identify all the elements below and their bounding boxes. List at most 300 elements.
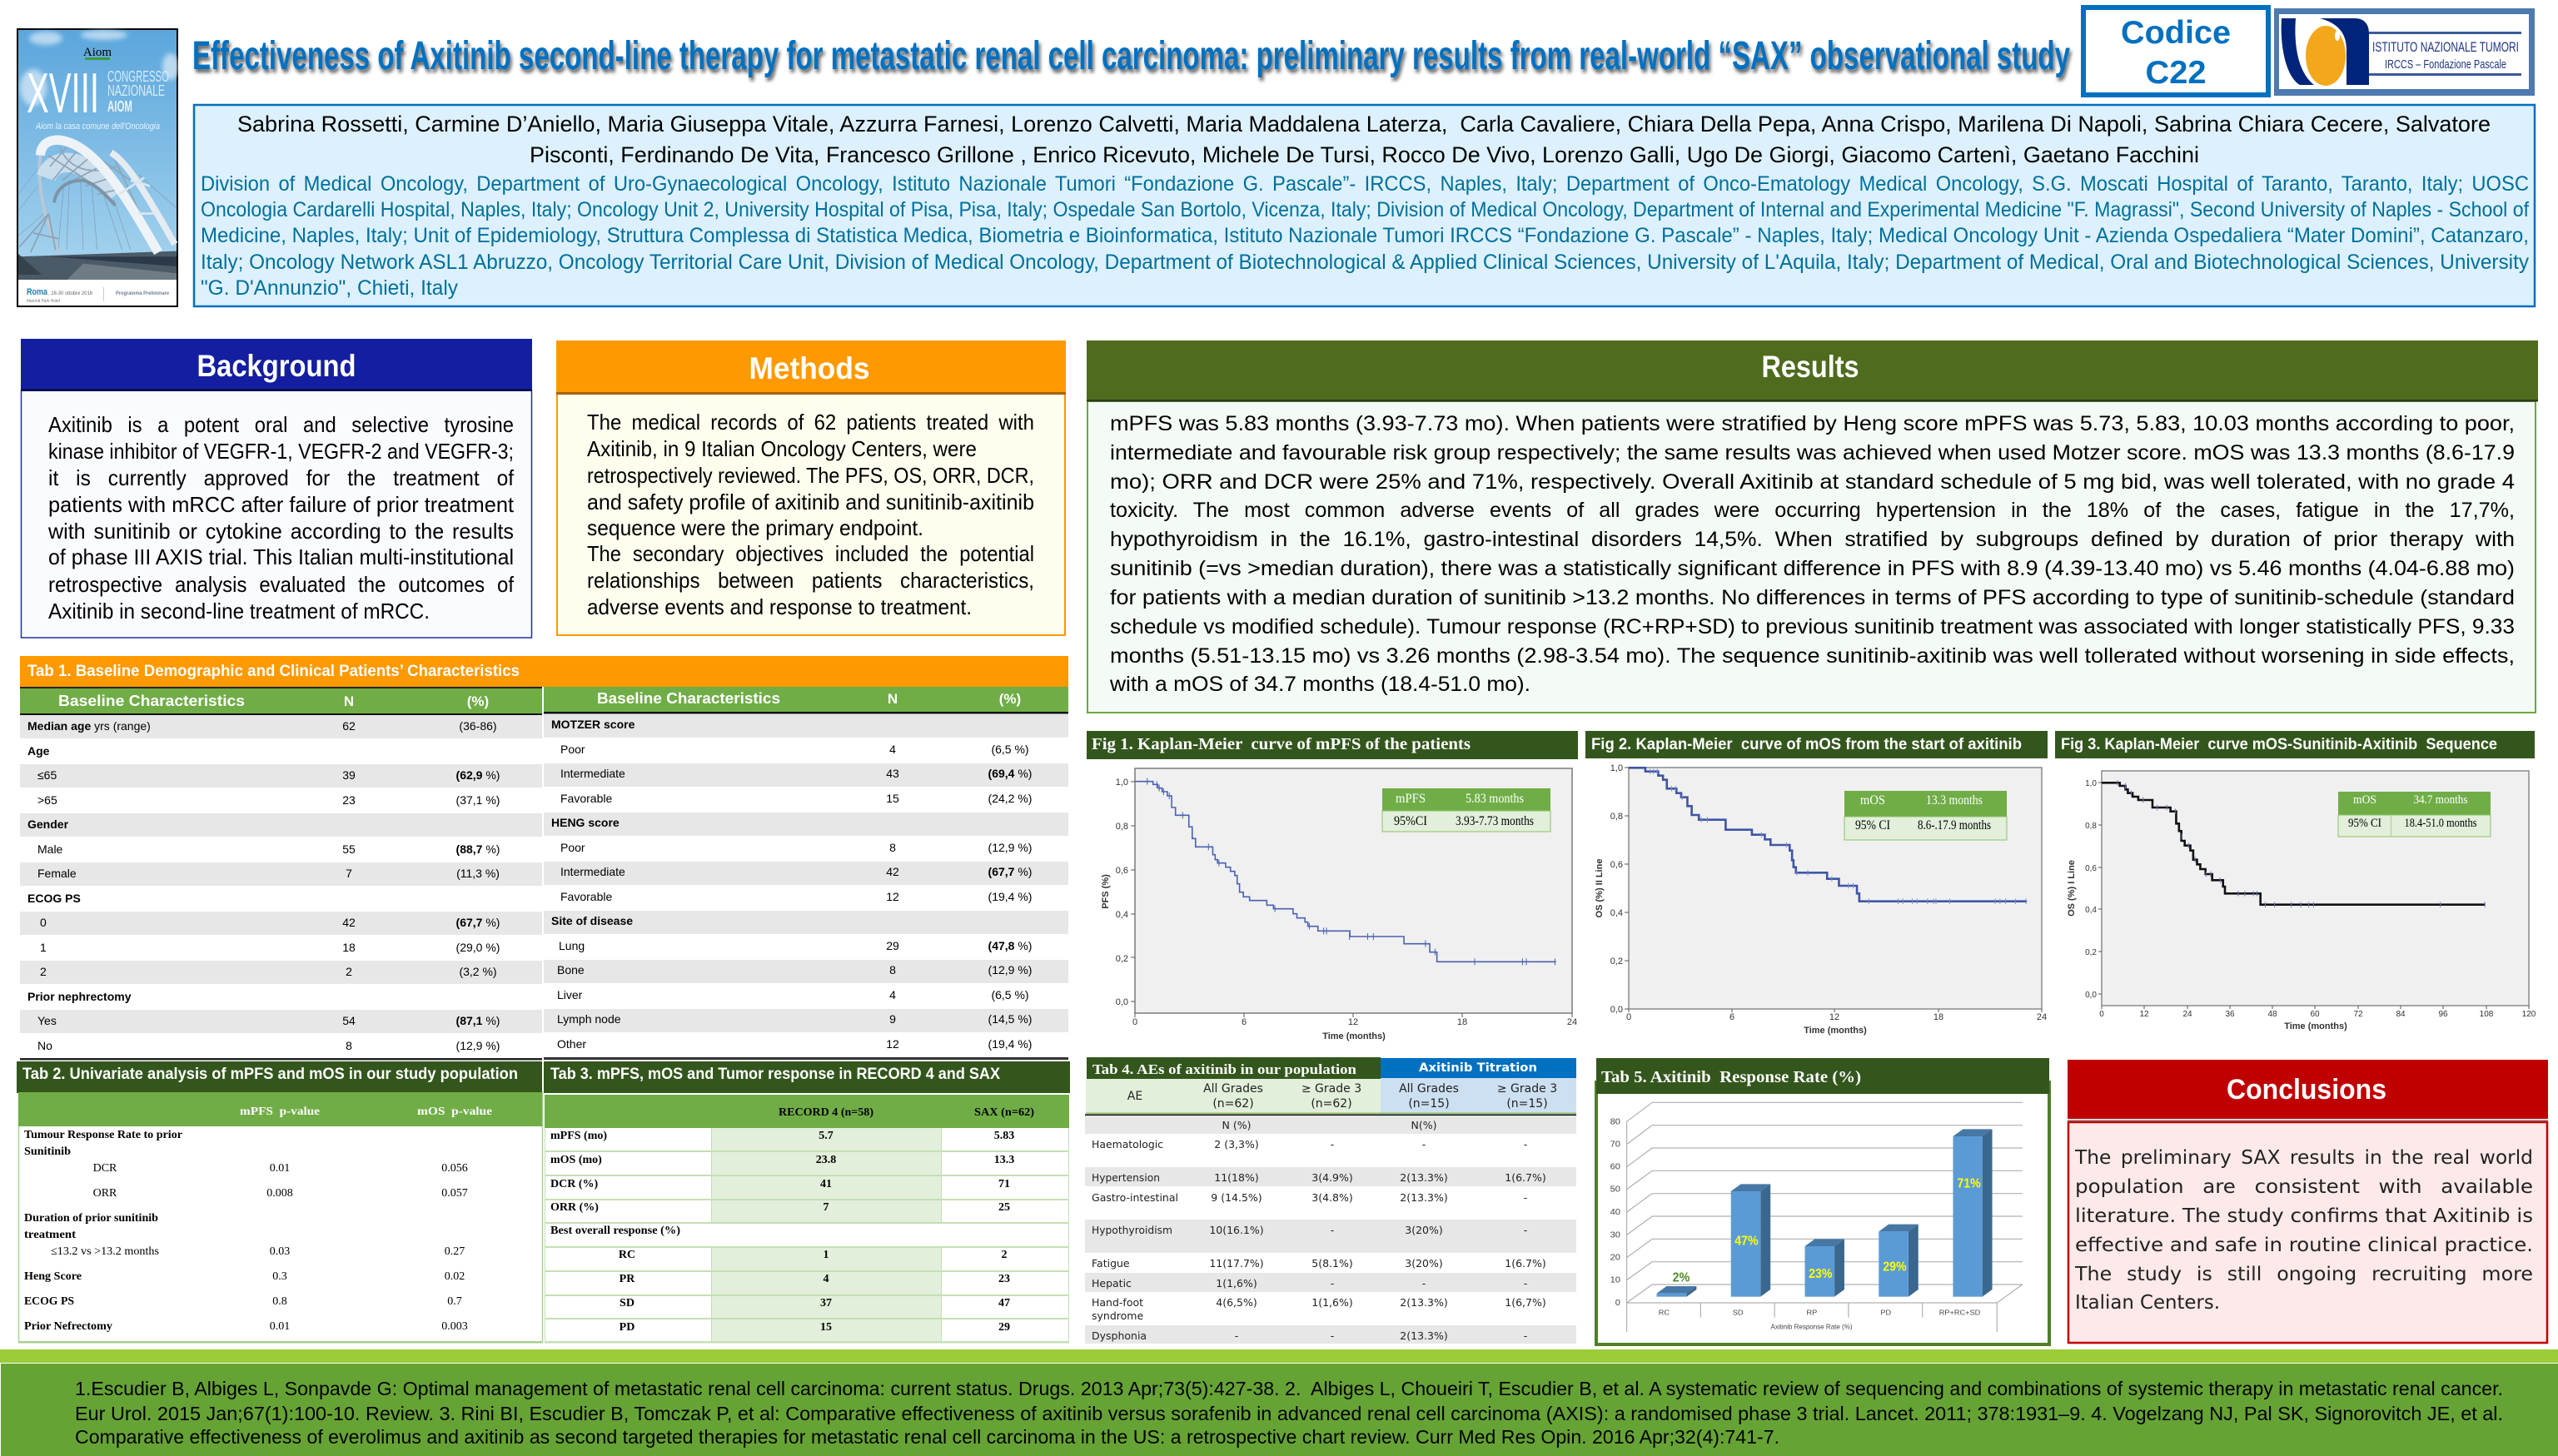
table 1 right column: (69,4 %)	[988, 767, 1032, 780]
table 2 cells: DCR	[93, 1162, 117, 1175]
table 3 cells: 23	[998, 1273, 1010, 1285]
panel: results	[1087, 340, 2538, 713]
table 1: baseline characteristics	[20, 656, 1068, 1061]
background text: with sunitinib or cytokine according to the results	[47, 519, 514, 544]
conclusions text: effective and safe in routine clinical practice.	[2075, 1235, 2533, 1256]
bar chart: SD	[1733, 1309, 1744, 1317]
table 1 right column: (14,5 %)	[988, 1012, 1032, 1026]
methods text: Axitinib, in 9 Italian Oncology Centers, were	[587, 436, 977, 461]
figure 3 survival curve	[2102, 780, 2485, 907]
conclusions text: literature. The study confirms that Axitinib is	[2075, 1205, 2533, 1227]
table 1 left column: ≤65	[37, 768, 57, 782]
figure 1 inset table: mPFS	[1396, 792, 1426, 806]
figure 2 axes labels: 6	[1729, 1012, 1734, 1022]
figure 2 title: Fig 2. Kaplan-Meier curve of mOS from the start of axitinib	[1591, 736, 2022, 753]
bar chart: 30	[1610, 1231, 1620, 1240]
table 3 cells: PD	[620, 1321, 635, 1334]
figure 3 axes labels: 1,0	[2085, 779, 2097, 788]
figure 1 axes labels: 0,0	[1116, 997, 1128, 1007]
table 3 cells: 37	[820, 1297, 832, 1309]
affiliations: "G. D'Annunzio", Chieti, Italy	[201, 276, 458, 300]
heading: conclusions: Conclusions	[2227, 1074, 2386, 1106]
figure 1 axes labels: 0,6	[1116, 866, 1128, 876]
table 4 cells: Hypothyroidism	[1092, 1224, 1172, 1236]
table 4 cells: 3(20%)	[1405, 1224, 1443, 1236]
table 4 cells: Gastro-intestinal	[1092, 1191, 1178, 1204]
table 2 cells: mOS p-value	[417, 1106, 492, 1118]
figure 1 axes labels: 18	[1457, 1017, 1467, 1027]
bar chart: RP	[1807, 1309, 1818, 1317]
table 3 cells: PR	[620, 1273, 635, 1285]
table 1 left column: (3,2 %)	[459, 965, 497, 978]
table 1 right column: 9	[889, 1012, 896, 1026]
authors and affiliations panel: Pisconti, Ferdinando De Vita, Francesco Grillone , Enrico Ricevuto, Michele De Tursi, Rocco De Vivo, Lorenzo Galli, Ugo De Giorgi, Giacomo Cartenì, Gaetano Facchini	[530, 142, 2199, 167]
table 3 cells: mOS (mo)	[550, 1154, 602, 1166]
table 1 left column: Yes	[37, 1014, 57, 1027]
table 1 right column: Poor	[560, 841, 585, 854]
figure 1 axes labels: 12	[1348, 1017, 1358, 1027]
figure 1 inset table: 5.83 months	[1466, 792, 1524, 806]
background text: of phase III AXIS trial. This Italian multi-institutional	[48, 544, 514, 569]
table 3 cells: DCR (%)	[550, 1178, 598, 1190]
table 1 left column: 18	[342, 941, 356, 954]
table 4 cells: ≥ Grade 3	[1497, 1082, 1557, 1096]
table 1 right column: 4	[889, 988, 896, 1001]
table 1 right column: (47,8 %)	[988, 939, 1032, 952]
table 1 right column: 29	[886, 939, 899, 952]
table 1 right column: (24,2 %)	[988, 792, 1032, 805]
results text: intermediate and favourable risk group respectively; the same results was achieved when used Motzer score. mOS was 13.3 months (8.6-17.9	[1110, 441, 2515, 465]
results text: schedule vs modified schedule). Tumour response (RC+RP+SD) to previous sunitinib treatment was associated with longer statistically PFS, 9.33	[1110, 615, 2515, 639]
table 3 cells: 7	[823, 1201, 829, 1214]
background text: patients with mRCC after failure of prior treatment	[48, 492, 515, 517]
table 4 cells: 9 (14.5%)	[1211, 1191, 1262, 1204]
table 1 left column: No	[37, 1039, 52, 1052]
table 4 cells: All Grades	[1203, 1082, 1263, 1096]
table 4: adverse events	[1085, 1057, 1576, 1344]
congress poster image: Marriott Park Hotel	[27, 299, 60, 304]
table 4 cells: 4(6,5%)	[1216, 1296, 1257, 1309]
figure 2 axes labels: 1,0	[1610, 763, 1623, 773]
table 1 right column: Intermediate	[560, 865, 625, 878]
bar chart: 23%	[1809, 1267, 1833, 1281]
bar chart: RP+RC+SD	[1939, 1309, 1980, 1317]
figure 3 axes labels: 12	[2139, 1010, 2149, 1019]
table 1 left column: (62,9 %)	[456, 768, 500, 782]
table 4 cells: -	[1524, 1138, 1527, 1150]
table 1 right column: 8	[889, 841, 896, 854]
table 2 cells: treatment	[24, 1229, 76, 1241]
figure 3 axes labels: 48	[2267, 1010, 2277, 1019]
congress poster image: XVIII	[27, 62, 99, 125]
table 1 right column: Baseline Characteristics	[597, 690, 780, 707]
table 4 cells: 2(13.3%)	[1400, 1296, 1448, 1309]
results text: sunitinib (=vs >median duration), there was a statistically significant difference in PFS with 8.9 (4.39-13.40 mo) vs 5.46 months (4.04-6.88 mo)	[1110, 557, 2515, 580]
bar chart: 10	[1610, 1276, 1620, 1285]
figure 1 inset table	[1382, 788, 1550, 832]
table 1 left column: Male	[37, 842, 63, 856]
methods text: sequence were the primary endpoint.	[587, 515, 923, 540]
figure 1 axes labels	[1101, 778, 1577, 1041]
table 4 cells: ≥ Grade 3	[1301, 1082, 1361, 1096]
figure 1 axes labels: 0	[1132, 1017, 1137, 1027]
table 4 cells: -	[1235, 1329, 1238, 1342]
table 2 cells: 0.8	[272, 1295, 287, 1308]
bar chart: Axitinib Response Rate (%)	[1771, 1323, 1853, 1331]
figure 3 inset table: 95% CI	[2348, 817, 2381, 830]
table 2: univariate analysis	[17, 1061, 543, 1344]
table 4 cells: 1(1,6%)	[1311, 1296, 1353, 1309]
authors and affiliations panel: Sabrina Rossetti, Carmine D’Aniello, Maria Giuseppa Vitale, Azzurra Farnesi, Lorenzo Calvetti, Maria Maddalena Laterza, Carla Cavaliere, Chiara Della Pepa, Anna Crispo, Marilena Di Napoli, Sabrina Chiara Cecere, Salvatore	[237, 112, 2491, 137]
figure 3 axes labels: 60	[2310, 1010, 2320, 1019]
bar chart: 20	[1610, 1254, 1620, 1262]
table 3 cells: 25	[998, 1201, 1010, 1214]
figure 3 axes labels: 36	[2225, 1010, 2235, 1019]
congress poster image: , 28-30 ottobre 2016	[48, 291, 93, 296]
figure 3 title: Fig 3. Kaplan-Meier curve mOS-Sunitinib-Axitinib Sequence	[2061, 736, 2497, 753]
table 1 right column: Favorable	[560, 890, 612, 903]
table 4 cells: 11(18%)	[1214, 1171, 1259, 1184]
table 2 cells: Sunitinib	[24, 1145, 71, 1158]
results text: with a mOS of 34.7 months (18.4-51.0 mo).	[1109, 673, 1530, 696]
table 1 right column: (19,4 %)	[988, 1037, 1032, 1051]
code box	[2083, 7, 2268, 95]
table 1 right column: 15	[886, 792, 899, 805]
table 2 cells: 0.01	[270, 1320, 290, 1333]
table 4 cells: Fatigue	[1092, 1257, 1130, 1270]
table 3 cells: 1	[823, 1249, 829, 1261]
table 4 title: Tab 4. AEs of axitinib in our population	[1092, 1061, 1357, 1077]
table 3 cells	[550, 1106, 1034, 1334]
table 4 cells: (n=15)	[1506, 1097, 1548, 1111]
table 3 cells: RECORD 4 (n=58)	[779, 1106, 873, 1119]
table 3 cells: 23.8	[816, 1154, 836, 1166]
background text: it is currently approved for the treatment of	[48, 465, 515, 490]
bar chart: 80	[1610, 1118, 1620, 1126]
figure 2 inset table: 8.6-.17.9 months	[1918, 818, 1991, 832]
figure 3 axes labels: 72	[2353, 1010, 2363, 1019]
table 1 left column: 54	[342, 1014, 356, 1027]
table 1 left column: (88,7 %)	[456, 842, 500, 856]
bar chart: 2%	[1673, 1270, 1690, 1285]
table 3 cells: 5.83	[994, 1130, 1014, 1142]
figure 2 inset table: 95% CI	[1855, 818, 1890, 832]
table 4 cells: (n=15)	[1408, 1097, 1450, 1111]
table 1 left column	[27, 693, 500, 1052]
heading: background: Background	[197, 349, 356, 383]
figure 3 axes labels: OS (%) I Line	[2067, 860, 2077, 917]
table 2 cells: ECOG PS	[24, 1295, 74, 1308]
table 2 cells: mPFS p-value	[240, 1106, 320, 1118]
methods text: The medical records of 62 patients treated with	[587, 410, 1034, 435]
figure 3 axes labels: Time (months)	[2284, 1021, 2347, 1031]
figure 1 title: Fig 1. Kaplan-Meier curve of mPFS of the patients	[1092, 735, 1471, 753]
table 4 cells: 3(4.8%)	[1311, 1191, 1353, 1204]
figure 2 axes labels: 0,6	[1610, 860, 1623, 870]
table 4 cells: Dysphonia	[1092, 1329, 1147, 1342]
figure 1 axes labels: 0,8	[1116, 822, 1128, 832]
table 1 left column: 8	[346, 1039, 352, 1052]
table 1 left column: Gender	[27, 817, 69, 831]
figure 1 axes labels: 6	[1242, 1017, 1247, 1027]
table 2 cells: 0.057	[441, 1187, 468, 1200]
table 2 cells: 0.056	[441, 1162, 468, 1175]
table 1 right column: N	[888, 691, 898, 707]
table 4 cells: (n=62)	[1212, 1097, 1254, 1111]
references footer	[0, 1349, 2558, 1456]
table 3: RECORD 4 versus SAX	[544, 1061, 1070, 1344]
table 2 cells: ORR	[93, 1187, 117, 1200]
table 1 right column	[551, 690, 1032, 1051]
methods text: and safety profile of axitinib and sunitinib-axitinib	[587, 489, 1034, 514]
figure 2 inset table: 13.3 months	[1926, 793, 1983, 808]
table 4 cells: -	[1524, 1329, 1527, 1342]
table 1 left column: 7	[346, 867, 352, 880]
table 1 left column: 23	[342, 793, 356, 807]
table 1 right column: Lung	[559, 939, 585, 952]
results text: mo); ORR and DCR were 25% and 71%, respectively. Overall Axitinib at standard schedule of 5 mg bid, was well tolerated, with no grade 4	[1110, 470, 2515, 494]
code box: Codice	[2121, 15, 2231, 51]
figure 1 inset table: 95%CI	[1394, 814, 1427, 828]
table 1 left column: Median age yrs (range)	[27, 719, 151, 733]
bar chart: PD	[1880, 1309, 1891, 1317]
table 3 cells: 41	[820, 1178, 832, 1190]
figure 3 axes labels: 0	[2099, 1010, 2104, 1019]
table 4 cells: N (%)	[1222, 1119, 1251, 1131]
table 1 left column: Age	[27, 744, 50, 758]
table 4 cells: -	[1524, 1191, 1527, 1204]
table 1 right column: Favorable	[560, 792, 612, 805]
table 1 left column: 0	[40, 916, 47, 929]
table 1 right column: (12,9 %)	[988, 963, 1032, 976]
figure 2 axes labels: 24	[2037, 1012, 2047, 1022]
bar chart: 0	[1615, 1299, 1620, 1308]
table 1 left column: (67,7 %)	[456, 916, 500, 929]
figure 2 axes labels: 0,4	[1610, 908, 1623, 918]
table 1 left column: (29,0 %)	[456, 941, 500, 954]
figure 1 axes labels: Time (months)	[1322, 1031, 1386, 1041]
methods text: retrospectively reviewed. The PFS, OS, ORR, DCR,	[587, 463, 1034, 488]
table 4 cells: N(%)	[1411, 1119, 1436, 1131]
figure 3 inset table: 34.7 months	[2413, 793, 2468, 807]
bar chart: 60	[1610, 1163, 1620, 1171]
table 1 right column: Intermediate	[560, 767, 625, 780]
table 1 left column: N	[344, 693, 354, 709]
table 2 cells: 0.003	[441, 1320, 468, 1333]
congress poster image	[17, 28, 179, 307]
table 2 cells: 0.01	[270, 1162, 290, 1175]
table 1 left column: Female	[37, 867, 77, 880]
conclusions text: The preliminary SAX results in the real world	[2074, 1147, 2533, 1169]
table 4 cells: -	[1422, 1277, 1426, 1290]
conclusions text: population are consistent with available	[2075, 1176, 2533, 1198]
table 1 left column: 39	[342, 768, 356, 782]
figure 3: Kaplan-Meier mOS sunitinib-axitinib sequence	[2055, 731, 2536, 1031]
figure 2 axes labels: 18	[1933, 1012, 1943, 1022]
figure 2 axes labels: Time (months)	[1804, 1026, 1867, 1036]
table 1 right column: Lymph node	[557, 1012, 621, 1026]
table 2 cells: 0.03	[270, 1245, 290, 1258]
background text	[47, 412, 515, 624]
methods text: relationships between patients characteristics,	[587, 568, 1034, 593]
table 1 right column: Liver	[557, 988, 583, 1001]
heading: results: Results	[1762, 350, 1859, 384]
table 4 cells: -	[1331, 1277, 1334, 1290]
results text: mPFS was 5.83 months (3.93-7.73 mo). When patients were stratified by Heng score mPFS was 5.73, 5.83, 10.03 months according to poor,	[1110, 412, 2515, 435]
table 2 cells: Duration of prior sunitinib	[24, 1212, 158, 1225]
table 3 cells: 47	[998, 1297, 1010, 1309]
figure 3 axes labels	[2067, 779, 2536, 1031]
table 1 right column: Bone	[557, 963, 585, 976]
methods text: adverse events and response to treatment.	[587, 594, 972, 619]
chart title: Tab 5. Axitinib Response Rate (%)	[1601, 1068, 1861, 1086]
background text: Axitinib in second-line treatment of mRCC.	[48, 599, 430, 624]
table 4 cells: 3(20%)	[1405, 1257, 1443, 1270]
table 4 cells: -	[1524, 1224, 1527, 1236]
table 2 cells: 0.27	[445, 1245, 465, 1258]
table 2 cells	[24, 1106, 492, 1333]
table 4 cells: Hypertension	[1092, 1171, 1160, 1184]
conclusions text: The study is still ongoing recruiting more	[2074, 1264, 2533, 1285]
table 1 left column: Baseline Characteristics	[58, 693, 245, 709]
affiliations	[201, 172, 2529, 300]
references text: Eur Urol. 2015 Jan;67(1):100-10. Review. 3. Rini BI, Escudier B, Tomczak P, et al: Comparative effectiveness of axitinib versus sorafenib in advanced renal cell carcinoma (AXIS): a randomised phase 3 trial. Lancet. 2011; 378:1931–9. 4. Vogelzang NJ, Pal SK, Signorovitch JE, et al.	[75, 1403, 2503, 1424]
figure 2 axes labels: OS (%) II Line	[1595, 859, 1605, 917]
table 3 cells: ORR (%)	[550, 1201, 599, 1214]
figure 2 axes labels	[1595, 763, 2047, 1036]
table 4 cells: 2(13.3%)	[1400, 1329, 1448, 1342]
table 1 left column: ECOG PS	[27, 892, 81, 905]
table 4 titration heading: Axitinib Titration	[1419, 1061, 1537, 1075]
figure 3 axes labels: 0,0	[2085, 991, 2097, 1000]
table 5: axitinib response rate chart	[1596, 1058, 2049, 1344]
table 3 cells: 15	[820, 1321, 832, 1334]
table 1 left column: 1	[40, 941, 47, 954]
table 3 cells: SAX (n=62)	[974, 1106, 1034, 1119]
table 3 cells: RC	[619, 1249, 635, 1261]
table 3 cells: Best overall response (%)	[550, 1225, 680, 1237]
table 1 right column: (6,5 %)	[991, 743, 1029, 756]
figure 3 inset table: mOS	[2353, 793, 2376, 807]
table 3 title: Tab 3. mPFS, mOS and Tumor response in RECORD 4 and SAX	[550, 1066, 1000, 1083]
table 4 cells: 5(8.1%)	[1311, 1257, 1353, 1270]
results text: toxicity. The most common adverse events of all grades were occurring hypertension in the 18% of the cases, fatigue in the 17,7%,	[1110, 499, 2515, 522]
table 2 cells: 0.008	[266, 1187, 293, 1200]
table 2 cells: 0.7	[447, 1295, 462, 1308]
table 4 cells	[1092, 1082, 1557, 1342]
panel: methods	[556, 340, 1066, 635]
figure 2 axes labels: 0,2	[1610, 957, 1623, 967]
background text: kinase inhibitor of VEGFR-1, VEGFR-2 and VEGFR-3;	[48, 439, 514, 464]
table 2 cells: Tumour Response Rate to prior	[24, 1129, 182, 1141]
figure 2: Kaplan-Meier mOS from start of axitinib	[1585, 731, 2048, 1036]
institute logo: IRCCS – Fondazione Pascale	[2385, 57, 2506, 72]
table 1 left column: (87,1 %)	[456, 1014, 500, 1027]
bar chart: 40	[1610, 1209, 1620, 1217]
table 4 cells: Haematologic	[1092, 1138, 1163, 1150]
table 4 cells: -	[1422, 1138, 1426, 1150]
table 3 cells: SD	[620, 1297, 635, 1309]
table 4 cells: 3(4.9%)	[1311, 1171, 1353, 1184]
table 1 right column: 4	[889, 743, 896, 756]
figure 3 inset table: 18.4-51.0 months	[2405, 817, 2477, 830]
table 1 right column: HENG score	[551, 816, 620, 829]
table 4 cells: 1(1,6%)	[1216, 1277, 1257, 1290]
figure 1 axes labels: 1,0	[1116, 778, 1128, 788]
table 1 right column: Other	[557, 1037, 586, 1051]
table 4 cells: 10(16.1%)	[1209, 1224, 1264, 1236]
bar chart: 50	[1610, 1185, 1620, 1194]
table 3 cells: 4	[823, 1273, 829, 1285]
references text: Comparative effectiveness of everolimus and axitinib as second targeted therapies for metastatic renal cell carcinoma in the US: a retrospective chart review. Curr Med Res Opin. 2016 Apr;32(4):741-7.	[75, 1426, 1779, 1448]
congress poster image: Aiom	[83, 46, 112, 59]
table 1 right column: (67,7 %)	[988, 865, 1032, 878]
table 4 cells: -	[1331, 1329, 1334, 1342]
background text: retrospective analysis evaluated the outcomes of	[48, 572, 515, 597]
table 1 right column: (12,9 %)	[988, 841, 1032, 854]
table 4 cells: -	[1331, 1224, 1334, 1236]
panel: background	[21, 339, 532, 638]
figure 1 axes labels: 0,4	[1116, 910, 1128, 920]
table 1 left column: (37,1 %)	[456, 793, 500, 807]
figure 3 axes labels: 96	[2438, 1010, 2448, 1019]
table 1 title: Tab 1. Baseline Demographic and Clinical Patients’ Characteristics	[27, 663, 520, 680]
figure 1: Kaplan-Meier mPFS	[1087, 731, 1578, 1041]
bar chart: 70	[1610, 1140, 1620, 1149]
heading: methods: Methods	[749, 351, 869, 385]
table 1 right column: (19,4 %)	[988, 890, 1032, 903]
code box: C22	[2145, 55, 2207, 91]
table 1 left column: 55	[342, 842, 356, 856]
table 3 cells: 5.7	[819, 1130, 834, 1142]
table 1 left column: Prior nephrectomy	[27, 990, 132, 1003]
table 3 cells: 13.3	[994, 1154, 1014, 1166]
congress poster image: Aiom la casa comune dell'Oncologia	[35, 122, 160, 132]
figure 3 inset table	[2338, 792, 2491, 837]
figure 3 axes labels: 0,4	[2085, 906, 2097, 915]
figure 1 axes labels: 0,2	[1116, 954, 1128, 964]
congress poster image: Programma Preliminare	[116, 291, 170, 296]
table 4 cells: Hepatic	[1092, 1277, 1132, 1290]
table 2 title: Tab 2. Univariate analysis of mPFS and mOS in our study population	[22, 1066, 518, 1083]
congress poster image: NAZIONALE	[107, 82, 165, 99]
table 4 cells: 1(6,7%)	[1505, 1296, 1546, 1309]
figure 2 inset table	[1844, 791, 2007, 840]
figure 2 inset table: mOS	[1860, 793, 1885, 808]
congress poster image: AIOM	[107, 98, 132, 115]
table 1 right column: 12	[886, 1037, 899, 1051]
table 2 cells: Heng Score	[24, 1270, 82, 1283]
table 2 cells: 0.02	[445, 1270, 465, 1283]
table 4 cells: All Grades	[1399, 1082, 1459, 1096]
background text: Axitinib is a potent oral and selective tyrosine	[48, 412, 514, 437]
figure 2 axes labels: 0	[1626, 1012, 1631, 1022]
references text	[75, 1378, 2503, 1448]
references text: 1.Escudier B, Albiges L, Sonpavde G: Optimal management of metastatic renal cell carcinoma: current status. Drugs. 2013 Apr;73(5):427-38. 2. Albiges L, Choueiri T, Escudier B, et al. A systematic review of sequencing and combinations of systemic therapy in metastatic renal cancer.	[75, 1378, 2503, 1399]
congress poster image: CONGRESSO	[107, 68, 169, 85]
table 4 cells: 2(13.3%)	[1400, 1171, 1448, 1184]
table 1 left column: (12,9 %)	[456, 1039, 500, 1052]
methods text: The secondary objectives included the potential	[587, 541, 1034, 566]
figure 2 survival curve	[1629, 768, 2027, 904]
table 4 cells: Hand-foot	[1092, 1296, 1143, 1309]
figure 1 axes labels: 24	[1567, 1017, 1577, 1027]
results text: for patients with a median duration of sunitinib >13.2 months. No differences in terms of PFS according to type of sunitinib-schedule (standard	[1110, 586, 2515, 609]
table 1 right column: MOTZER score	[551, 718, 635, 731]
bar chart: 47%	[1734, 1234, 1759, 1248]
table 3 cells: mPFS (mo)	[550, 1130, 607, 1142]
figure 3 axes labels: 24	[2182, 1010, 2192, 1019]
